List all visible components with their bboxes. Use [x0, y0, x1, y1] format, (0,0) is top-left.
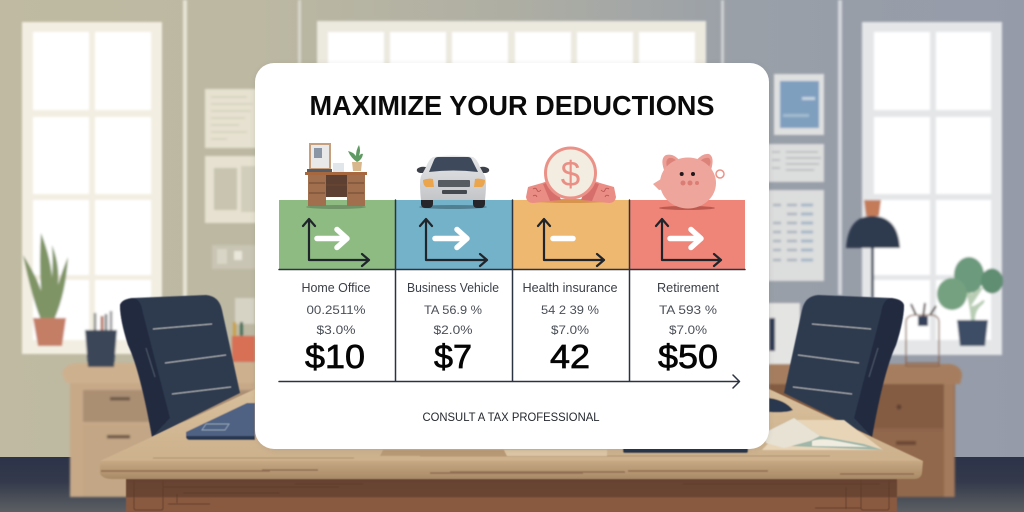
open book — [762, 418, 883, 450]
rate: TA 593 % — [659, 303, 717, 317]
right wall posters — [768, 74, 824, 365]
panel: home office — [279, 143, 395, 375]
icon: coin and hands: $ — [561, 155, 580, 194]
left shelf pencils — [232, 298, 255, 362]
icon: coin and hands — [526, 148, 616, 203]
rate: 54 2 39 % — [541, 303, 599, 317]
icon: chart axes — [303, 219, 369, 266]
left wall posters — [205, 89, 258, 269]
percentage: $7.0% — [551, 323, 589, 337]
dark laptop edge — [623, 445, 748, 453]
left chair — [120, 295, 240, 437]
panel: health insurance — [513, 148, 629, 375]
mouse — [769, 398, 793, 412]
table top — [100, 389, 923, 461]
icon: chart axes — [420, 219, 487, 266]
right window — [862, 22, 1002, 355]
label: Health insurance — [522, 281, 618, 295]
glass holder — [906, 303, 939, 366]
label: Retirement — [657, 281, 720, 295]
center window — [317, 21, 706, 71]
card body — [255, 63, 769, 449]
icon: piggy bank — [653, 154, 724, 210]
amount: 42 — [550, 338, 590, 375]
percentage: $3.0% — [316, 323, 356, 337]
icon: desk — [305, 143, 367, 209]
panel: retirement — [630, 154, 745, 375]
right chair — [784, 295, 904, 437]
infographic card — [255, 63, 769, 450]
home office color band — [279, 200, 395, 269]
icon: car — [417, 156, 489, 209]
icon: white arrow — [670, 230, 701, 248]
tablet — [186, 403, 255, 440]
left window — [22, 22, 162, 354]
left desk — [62, 363, 255, 497]
icon: white arrow — [435, 230, 467, 248]
icon: white arrow — [317, 230, 347, 248]
left plant — [23, 233, 68, 346]
rate: 00.2511% — [306, 303, 366, 317]
wall pillars — [183, 0, 842, 300]
title: MAXIMIZE YOUR DEDUCTIONS — [310, 90, 714, 121]
icon: chart axes — [538, 219, 604, 266]
desk lamp — [846, 200, 900, 298]
floor — [0, 457, 1024, 512]
right plant — [937, 257, 1003, 346]
health insurance color band — [513, 200, 629, 269]
icon: chart axes — [656, 219, 721, 266]
rate: TA 56.9 % — [424, 303, 482, 317]
percentage: $2.0% — [434, 323, 473, 337]
amount: $10 — [305, 338, 365, 375]
retirement color band — [630, 200, 745, 269]
icon: white dash — [553, 236, 573, 241]
card shadow — [255, 64, 769, 450]
table edge — [100, 461, 923, 479]
amount: $50 — [658, 338, 718, 375]
conference table — [100, 389, 923, 512]
label: Home Office — [302, 281, 371, 295]
amount: $7 — [434, 338, 472, 375]
business vehicle color band — [396, 200, 512, 269]
footer note: CONSULT A TAX PROFESSIONAL — [422, 410, 600, 424]
table grid lines and axis arrow — [279, 200, 745, 388]
percentage: $7.0% — [669, 323, 707, 337]
label: Business Vehicle — [407, 281, 499, 295]
pen cup — [85, 311, 117, 367]
right desk — [769, 364, 962, 497]
panel: business vehicle — [396, 156, 512, 375]
wood patches under card — [380, 450, 507, 456]
table front — [126, 479, 897, 512]
